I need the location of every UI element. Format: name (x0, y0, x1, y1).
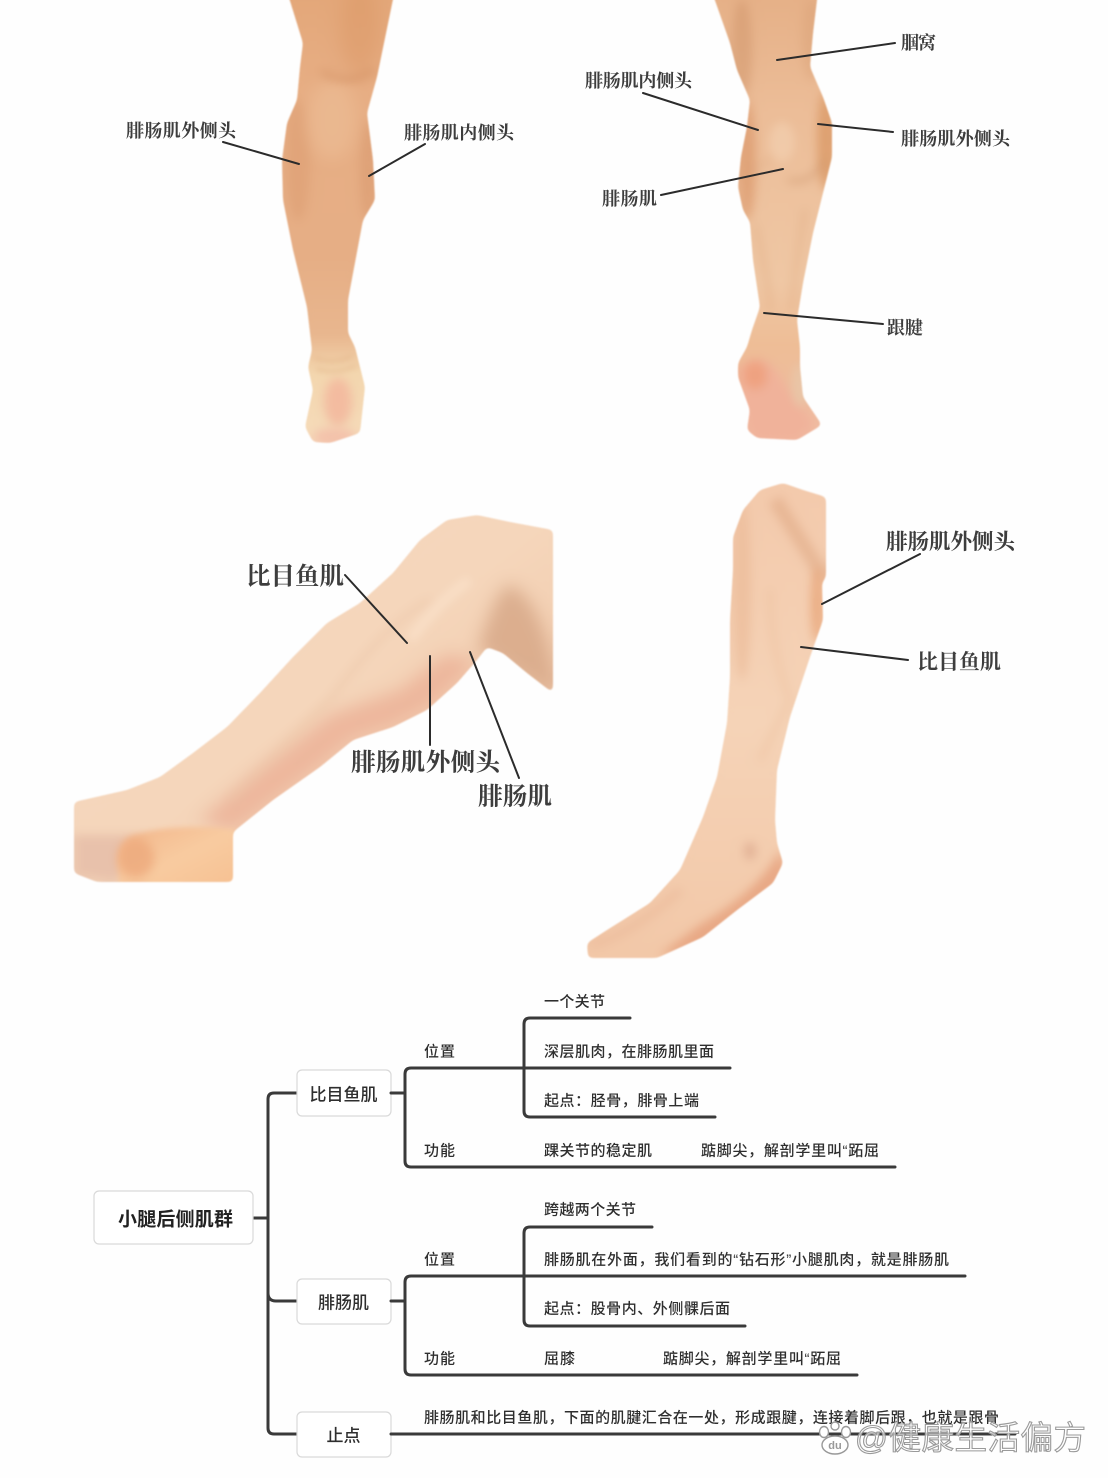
item: plantar flexion: 踮脚尖，解剖学里叫“跖屈 (701, 1142, 879, 1160)
leader line: soleus (801, 647, 908, 660)
illustration: lower leg and foot (586, 482, 827, 959)
leader line: gastrocnemius (470, 652, 519, 778)
item: knee flexion: 屈膝 (544, 1350, 575, 1368)
leader line: lateral head (818, 124, 893, 132)
root node (94, 1191, 253, 1244)
node: gastrocnemius: 腓肠肌 (318, 1294, 369, 1312)
label: lateral head: 腓肠肌外侧头 (901, 128, 1012, 149)
item: origin: 起点：股骨内、外侧髁后面 (544, 1300, 730, 1318)
label: soleus: 比目鱼肌 (246, 562, 344, 590)
item: deep muscle: 深层肌肉，在腓肠肌里面 (544, 1044, 714, 1060)
item: insertion description: 腓肠肌和比目鱼肌，下面的肌腱汇合在一处，形成跟腱，连接着脚后跟，也就是跟骨 (424, 1408, 999, 1426)
connectors: gastrocnemius (391, 1227, 965, 1375)
label: medial head of gastrocnemius: 腓肠肌内侧头 (404, 122, 516, 143)
watermark text: @健康生活偏方 (855, 1420, 1086, 1456)
leader line: popliteal fossa (777, 43, 895, 60)
label: Achilles tendon: 跟腱 (887, 318, 923, 338)
leader line: Achilles tendon (764, 313, 883, 324)
node: gastrocnemius (297, 1279, 391, 1324)
illustration: rear calf muscular (714, 0, 833, 441)
item: one joint: 一个关节 (544, 994, 605, 1010)
icon: paw logo (820, 1422, 850, 1454)
icon: paw logo: du (828, 1440, 842, 1452)
item: crosses two joints: 跨越两个关节 (544, 1202, 636, 1218)
connectors: soleus (391, 1018, 895, 1167)
item: origin: 起点：胫骨，腓骨上端 (544, 1092, 699, 1110)
item: stabilizer: 踝关节的稳定肌 (544, 1142, 652, 1160)
leader line: lateral head (822, 554, 920, 604)
label: function: 功能 (424, 1350, 455, 1368)
leader line: lateral head (429, 656, 431, 745)
leader line: gastrocnemius (661, 169, 783, 195)
leader line: soleus (345, 575, 407, 643)
node: insertion: 止点 (326, 1426, 360, 1446)
panel: lower leg front-side view, middle right (575, 475, 1017, 970)
label: position: 位置 (424, 1250, 455, 1268)
illustration: bent leg (73, 514, 554, 883)
panel: rear view of calf with labels, top right (585, 0, 1012, 450)
connector lines: trunk from root (253, 1093, 297, 1434)
label: gastrocnemius: 腓肠肌 (602, 189, 657, 209)
label: position: 位置 (424, 1042, 455, 1060)
leader line: medial head (643, 93, 758, 130)
label: lateral head of gastrocnemius: 腓肠肌外侧头 (126, 120, 238, 141)
label: soleus: 比目鱼肌 (917, 650, 1001, 674)
connector: insertion (391, 1432, 1015, 1436)
label: function: 功能 (424, 1142, 455, 1160)
node: soleus (297, 1070, 391, 1116)
watermark (820, 1420, 1086, 1456)
leader line: medial head (369, 144, 425, 176)
mind map: posterior calf muscle group (94, 994, 1015, 1457)
node: insertion (297, 1412, 391, 1457)
item: plantar flexion: 踮脚尖，解剖学里叫“跖屈 (663, 1350, 841, 1368)
label: lateral head: 腓肠肌外侧头 (351, 748, 502, 776)
label: popliteal fossa: 腘窝 (901, 32, 936, 53)
illustration: rear calf (281, 0, 394, 444)
node: soleus: 比目鱼肌 (310, 1086, 378, 1104)
root node: 小腿后侧肌群 (118, 1208, 233, 1230)
branch: insertion (297, 1408, 1015, 1457)
leader line: lateral head (223, 142, 299, 164)
panel: rear view of calf, top left (126, 0, 516, 450)
item: diamond shape: 腓肠肌在外面，我们看到的“钻石形”小腿肌肉，就是腓肠肌 (544, 1252, 949, 1268)
branch: gastrocnemius (297, 1202, 965, 1375)
branch: soleus (297, 994, 895, 1167)
panel: bent leg side view, middle left (73, 514, 554, 883)
label: gastrocnemius: 腓肠肌 (478, 782, 552, 810)
label: medial head: 腓肠肌内侧头 (585, 70, 694, 91)
label: lateral head: 腓肠肌外侧头 (886, 530, 1017, 554)
